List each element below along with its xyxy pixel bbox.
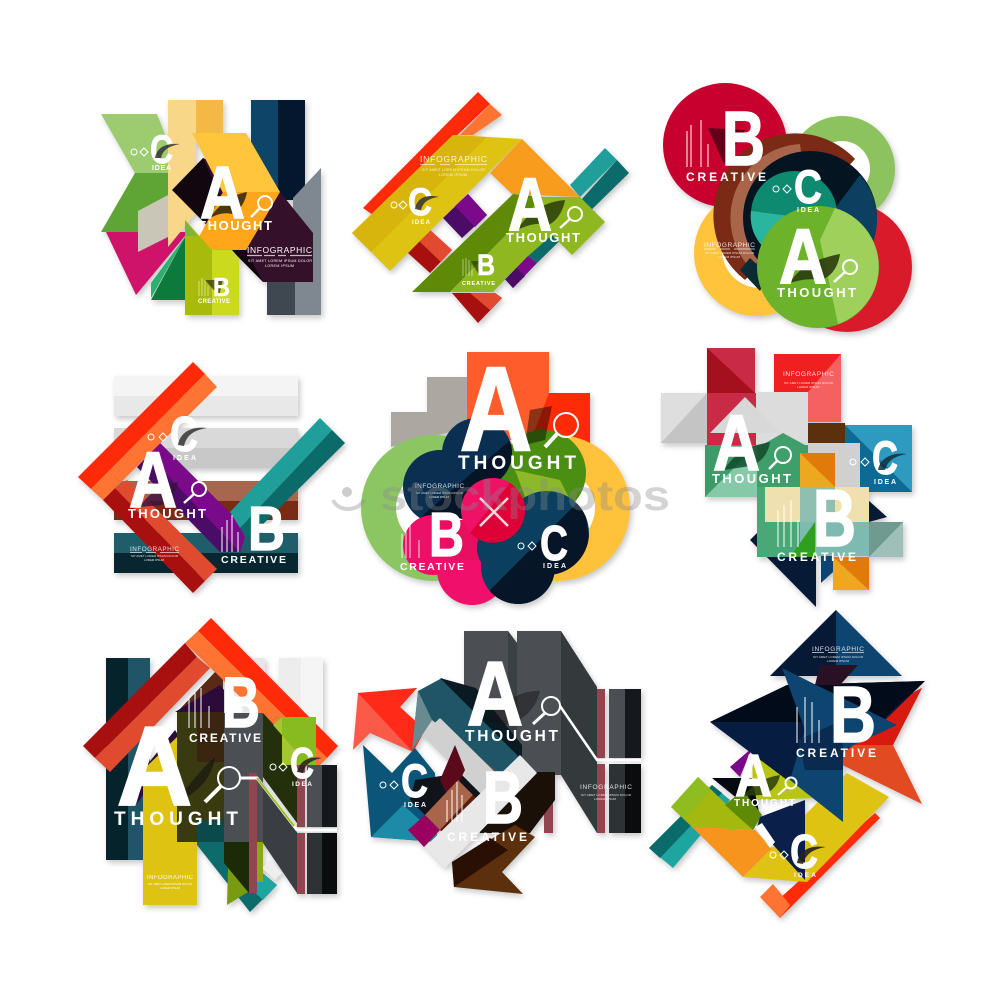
panel: chevrons top left bbox=[101, 100, 321, 315]
letter C idea bbox=[773, 160, 822, 214]
letter B creative: CREATIVE bbox=[796, 746, 876, 760]
letter B creative: CREATIVE bbox=[447, 830, 527, 844]
letter B creative: B bbox=[222, 664, 260, 743]
watermark: stockphotos bbox=[380, 472, 670, 520]
letter C idea: IDEA bbox=[797, 207, 819, 214]
infographic caption: SIT AMET LOREM IPSUM DOLOR bbox=[416, 491, 464, 495]
letter A thought: THOUGHT bbox=[712, 471, 791, 486]
letter A thought bbox=[114, 704, 240, 830]
letter C idea: IDEA bbox=[794, 872, 816, 879]
infographic caption: SIT AMET LOREM IPSUM DOLOR bbox=[784, 381, 834, 385]
icon: cross bbox=[480, 498, 508, 526]
infographic caption: LOREM IPSUM bbox=[265, 264, 294, 268]
infographic caption: SIT AMET LOREM IPSUM DOLOR bbox=[422, 168, 485, 172]
letter B creative bbox=[447, 756, 527, 844]
letter C idea: C bbox=[872, 431, 898, 484]
letter A thought bbox=[734, 743, 796, 809]
panel: arrows and columns bottom center bbox=[353, 631, 641, 894]
letter C idea: IDEA bbox=[404, 802, 426, 809]
letter C idea bbox=[270, 739, 322, 788]
letter A thought: THOUGHT bbox=[458, 453, 576, 474]
infographic caption: LOREM IPSUM bbox=[439, 173, 467, 177]
panel: squares middle right bbox=[661, 348, 912, 607]
letter B creative: CREATIVE bbox=[189, 731, 261, 745]
letter A thought: A bbox=[117, 704, 192, 829]
letter A thought: A bbox=[460, 343, 532, 476]
infographic caption: INFOGRAPHIC bbox=[580, 784, 632, 791]
letter B creative bbox=[777, 474, 856, 564]
shapes bbox=[83, 618, 338, 912]
letter A thought: A bbox=[508, 162, 552, 246]
infographic caption: SIT AMET LOREM IPSUM DOLOR bbox=[248, 259, 312, 263]
letter B creative: B bbox=[483, 756, 523, 839]
letter B creative: CREATIVE bbox=[198, 299, 230, 305]
shapes bbox=[353, 631, 641, 894]
shapes bbox=[101, 100, 321, 315]
letter C idea bbox=[770, 826, 826, 879]
infographic caption bbox=[247, 245, 312, 268]
infographic caption: SIT AMET LOREM IPSUM DOLOR bbox=[131, 554, 179, 558]
letter C idea bbox=[148, 408, 207, 462]
infographic caption bbox=[812, 646, 864, 663]
letter C: IDEA bbox=[152, 165, 171, 172]
panel: diagonal bands top center bbox=[352, 92, 629, 323]
letter B creative: B bbox=[213, 272, 230, 302]
letter C idea: C bbox=[290, 739, 314, 788]
infographic caption: SIT AMET LOREM IPSUM DOLOR bbox=[148, 882, 193, 886]
letter A thought: A bbox=[129, 435, 177, 524]
infographic caption: INFOGRAPHIC bbox=[812, 646, 864, 653]
letter A thought: THOUGHT bbox=[114, 809, 238, 830]
letter C idea: C bbox=[170, 408, 198, 462]
infographic caption bbox=[130, 546, 179, 562]
letter C idea: IDEA bbox=[292, 781, 312, 788]
infographic caption: INFOGRAPHIC bbox=[415, 483, 464, 490]
infographic caption: LOREM IPSUM bbox=[718, 255, 740, 259]
panel: roof and columns bottom left bbox=[83, 618, 338, 912]
shapes bbox=[649, 610, 925, 918]
infographic caption: SIT AMET LOREM IPSUM DOLOR bbox=[705, 251, 755, 255]
letter B creative: CREATIVE bbox=[686, 170, 766, 184]
letter C idea: C bbox=[540, 517, 568, 571]
letter A thought: A bbox=[713, 398, 760, 487]
letter B creative: B bbox=[477, 249, 495, 282]
letter A thought bbox=[465, 644, 560, 745]
letter A thought: THOUGHT bbox=[734, 798, 795, 809]
infographic caption: LOREM IPSUM bbox=[827, 659, 850, 663]
infographic caption bbox=[420, 154, 487, 177]
letter B creative: CREATIVE bbox=[400, 561, 464, 573]
infographic caption: INFOGRAPHIC bbox=[147, 875, 194, 881]
panel: cloud circles center bbox=[333, 343, 670, 610]
letter C idea: IDEA bbox=[173, 455, 196, 462]
infographic caption: INFOGRAPHIC bbox=[704, 242, 755, 249]
panel: stars bottom right bbox=[649, 610, 925, 918]
letter B creative: B bbox=[813, 474, 856, 564]
white gap bbox=[755, 823, 775, 848]
infographic caption bbox=[580, 784, 632, 801]
letter B creative: B bbox=[722, 96, 765, 182]
infographic sheet bbox=[78, 83, 927, 922]
letter A thought: A bbox=[779, 212, 827, 300]
letter A thought: A bbox=[735, 743, 772, 809]
shapes bbox=[78, 362, 345, 593]
letter C idea bbox=[391, 181, 439, 226]
infographic caption: INFOGRAPHIC bbox=[783, 371, 834, 378]
letter B creative: CREATIVE bbox=[462, 281, 495, 287]
shapes bbox=[352, 92, 629, 323]
letter C idea: C bbox=[408, 181, 432, 224]
infographic caption bbox=[704, 242, 755, 259]
infographic caption bbox=[147, 875, 194, 890]
letter B creative bbox=[462, 249, 495, 287]
letter C idea bbox=[518, 517, 568, 571]
white connector line bbox=[560, 706, 641, 760]
infographic caption bbox=[415, 483, 464, 499]
letter B creative bbox=[400, 501, 464, 573]
letter B creative bbox=[796, 670, 876, 760]
shapes bbox=[361, 352, 630, 610]
letter C idea: IDEA bbox=[874, 479, 896, 486]
infographic caption: LOREM IPSUM bbox=[429, 495, 450, 499]
infographic caption: INFOGRAPHIC bbox=[247, 245, 312, 255]
letter A thought: A bbox=[467, 644, 523, 745]
letter B creative: B bbox=[830, 670, 876, 759]
letter C idea: IDEA bbox=[543, 563, 566, 570]
infographic caption: INFOGRAPHIC bbox=[420, 154, 487, 164]
letter B creative bbox=[221, 495, 286, 566]
letter C idea bbox=[850, 431, 907, 486]
infographic caption: LOREM IPSUM bbox=[160, 886, 180, 890]
letter A thought: THOUGHT bbox=[465, 728, 559, 745]
letter C idea: C bbox=[794, 160, 822, 213]
shapes bbox=[663, 83, 912, 332]
letter B creative bbox=[198, 272, 230, 305]
letter C idea bbox=[380, 754, 428, 809]
panel: stripes and diagonal bands middle left bbox=[78, 362, 345, 593]
letter A thought: A bbox=[200, 151, 245, 234]
letter C bbox=[131, 128, 180, 172]
letter B creative bbox=[686, 96, 766, 184]
letter B creative: CREATIVE bbox=[221, 554, 286, 566]
shapes bbox=[661, 348, 912, 607]
letter B creative: B bbox=[248, 495, 285, 564]
letter C idea: IDEA bbox=[412, 220, 431, 226]
infographic caption: LOREM IPSUM bbox=[797, 385, 820, 389]
infographic caption: LOREM IPSUM bbox=[594, 797, 616, 801]
infographic caption: SIT AMET LOREM IPSUM DOLOR bbox=[813, 655, 864, 659]
letter C idea: C bbox=[790, 826, 818, 879]
letter B creative bbox=[189, 664, 261, 745]
letter C: C bbox=[150, 128, 173, 172]
infographic caption: LOREM IPSUM bbox=[144, 558, 164, 562]
letter C idea: C bbox=[401, 754, 428, 807]
letter B creative: CREATIVE bbox=[777, 550, 856, 564]
infographic caption: INFOGRAPHIC bbox=[130, 546, 179, 553]
letter A thought: THOUGHT bbox=[128, 506, 206, 521]
letter A thought: THOUGHT bbox=[506, 230, 580, 245]
letter A thought: THOUGHT bbox=[198, 218, 272, 233]
letter B creative: B bbox=[429, 501, 464, 570]
infographic caption bbox=[783, 371, 834, 389]
letter A thought: THOUGHT bbox=[777, 285, 856, 300]
infographic caption: SIT AMET LOREM IPSUM DOLOR bbox=[581, 793, 632, 797]
panel: circles top right bbox=[663, 83, 912, 332]
